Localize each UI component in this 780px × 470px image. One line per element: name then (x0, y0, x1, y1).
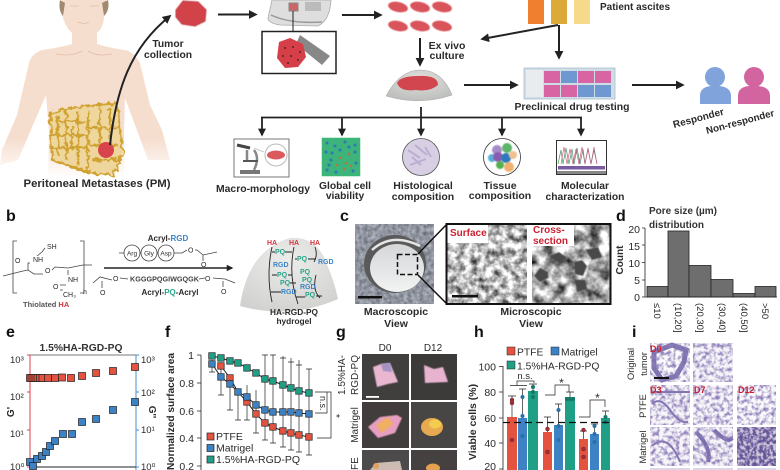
row of tiles cut at bottom edge (650, 468, 776, 470)
arrow: slicer to slices (342, 14, 381, 16)
row labels: 1.5%HA- (337, 355, 348, 395)
panel e: rheology (6, 324, 157, 470)
dashed reference line (503, 422, 612, 424)
row labels: RGD-PQ (350, 355, 361, 395)
legend: 1.5%HA-RGD-PQ (216, 454, 300, 466)
label: Non-responder: Non-responder (705, 108, 776, 137)
labels: thiolated HA atoms: O (45, 268, 51, 275)
legend (507, 347, 599, 372)
series: Matrigel markers (209, 361, 312, 417)
label: Tissue composition: Tissue (483, 180, 517, 192)
row labels: Matrigel (638, 430, 648, 464)
arrow: slices to culture (419, 38, 421, 65)
panel letter b: b (6, 208, 16, 225)
labels: thiolated HA atoms: n (83, 289, 87, 296)
series: PTFE markers (218, 363, 312, 440)
photo: SEM microscopic surface and cross-section (446, 224, 610, 304)
icon: excised tumor (176, 1, 206, 26)
panel b: hydrogel chemistry (3, 208, 338, 326)
panel letter f: f (165, 324, 171, 341)
y axis labels: 5 (634, 275, 640, 287)
x axis labels: (10,20] (672, 303, 683, 333)
label: Ex vivo culture: culture (429, 50, 465, 62)
x axis labels: ≤10 (651, 303, 662, 319)
row labels: tumor (639, 352, 649, 376)
label: Global cell viability: Global cell (319, 181, 371, 192)
tile: original tumor D0 (650, 343, 690, 382)
heading: Peritoneal Metastases (PM): Peritoneal Metastases (PM) (24, 178, 171, 190)
plot frame with coloured axes (27, 355, 139, 470)
illustration: patient torso with intestines (0, 0, 170, 178)
diagram: HA-RGD-PQ hydrogel dome: PQ (280, 280, 291, 287)
heading: Pore size distribution: distribution (649, 220, 704, 231)
icon: non-responder person (738, 67, 770, 104)
axis tick labels: 10² (10, 392, 24, 403)
x axis labels: (20,30] (694, 303, 705, 333)
photo: SEM microscopic surface and cross-section: section (533, 236, 568, 247)
panel c: hydrogel photographs (340, 208, 610, 330)
diagram: thiolated HA structure (3, 241, 92, 293)
axis tick labels: 10³ (141, 355, 155, 366)
y axis with ticks (642, 228, 777, 297)
legend (207, 431, 300, 466)
diagram: HA-RGD-PQ hydrogel dome: RGD (281, 289, 297, 296)
label: stars: * (559, 376, 564, 390)
diagram: HA-RGD-PQ hydrogel dome: HA (310, 240, 320, 247)
label: star: * (330, 414, 341, 418)
x axis labels (651, 303, 770, 333)
photo: macroscopic hydrogel disc (355, 224, 434, 304)
diagram: HA-RGD-PQ hydrogel dome: PQ (305, 292, 316, 299)
icon: responder person (700, 67, 731, 104)
label: Histological composition: Histological (393, 180, 453, 192)
labels: thiolated HA atoms (15, 244, 87, 299)
tile: PTFE D12: D12 (738, 385, 755, 395)
y axis title: Viable cells (%) (467, 384, 479, 460)
y axis labels (628, 224, 640, 304)
column labels: D12 (424, 343, 443, 354)
error bars (209, 355, 312, 455)
label: Molecular characterization: characterization (546, 192, 624, 203)
label: Molecular characterization: Molecular (561, 181, 609, 192)
histogram bars (647, 231, 776, 297)
diagram: KGGGPQGIWGQGK linker: O (221, 289, 227, 296)
arrow: tumor collection curve (110, 16, 170, 145)
labels: thiolated HA atoms: NH (68, 277, 78, 284)
label: Acryl-RGD: Acryl-RGD (148, 234, 188, 243)
label: n.s.: n.s. (517, 371, 533, 382)
tile: PTFE D7 (693, 385, 733, 425)
y axis labels: 0.6 (179, 406, 194, 418)
row labels (626, 348, 649, 464)
legend: PTFE (517, 348, 543, 358)
y axis title: Count: Count (615, 245, 626, 274)
label: stars: * (595, 391, 600, 405)
labels: thiolated HA atoms: O (53, 284, 59, 291)
label: Histological composition: composition (392, 191, 454, 203)
labels: thiolated HA atoms: CH₃ (63, 292, 76, 299)
series: G'' blue squares (26, 398, 138, 470)
icon: tissue composition cells (484, 138, 520, 176)
axis title G'': G'' (146, 406, 157, 418)
tile: original tumor D0: D0 (650, 344, 662, 354)
panel letter i: i (632, 324, 636, 341)
row labels: PTFE (638, 394, 648, 418)
photo: SEM microscopic surface and cross-section: Surface (450, 228, 487, 239)
diagram: KGGGPQGIWGQGK linker (93, 276, 235, 297)
column labels: D0 (379, 343, 392, 354)
y tick labels: 40 (484, 438, 496, 450)
column labels (379, 343, 443, 354)
label: Thiolated HA: Thiolated HA (23, 300, 70, 309)
label: Tissue composition: composition (469, 190, 531, 202)
diagram: HA-RGD-PQ hydrogel dome: HA (267, 240, 277, 247)
y tick labels: 80 (484, 387, 496, 399)
y axis labels: 20 (628, 224, 640, 236)
tile: 1.5%HA-RGD-PQ D12 (411, 354, 457, 400)
heading: 1.5%HA-RGD-PQ: 1.5%HA-RGD-PQ (40, 343, 122, 354)
y axis (197, 355, 201, 470)
y axis labels: 0.4 (179, 433, 194, 445)
y tick labels: 60 (484, 413, 496, 425)
arrow: tumor to slicer (218, 14, 256, 16)
diagram: KGGGPQGIWGQGK linker: KGGGPQGIWGQGK (130, 276, 199, 284)
panel letter g: g (336, 324, 346, 341)
diagram: HA-RGD-PQ hydrogel dome: PQ (297, 256, 308, 263)
tile: Matrigel D12 (411, 402, 457, 448)
branching arrows to analyses (261, 107, 582, 135)
y axis labels (179, 350, 194, 470)
icon: patient ascites tubes (528, 0, 590, 24)
tile: Matrigel D7 (693, 427, 733, 466)
diagram: HA-RGD-PQ hydrogel dome: RGD (300, 284, 316, 291)
label: stars (559, 376, 600, 405)
axis tick labels: 10¹ (141, 425, 155, 436)
panel h: viable cells chart (467, 324, 612, 470)
bars: 1.5%HA-RGD-PQ (528, 391, 610, 470)
legend: 1.5%HA-RGD-PQ (517, 362, 599, 372)
diagram: HA-RGD-PQ hydrogel dome (240, 238, 338, 312)
panel a: peritoneal metastases workflow (0, 0, 776, 203)
tile: PTFE D3 (650, 385, 690, 425)
panel letter c: c (340, 208, 349, 225)
x axis labels: (30,40] (716, 303, 727, 333)
legend: Matrigel (561, 348, 598, 358)
row labels: Matrigel (350, 407, 361, 443)
axis title: Normalized surface area (166, 353, 177, 470)
diagram: HA-RGD-PQ hydrogel dome: PQ (277, 272, 288, 279)
y axis labels: 10 (628, 258, 640, 270)
diagram: HA-RGD-PQ hydrogel dome: HA (289, 240, 299, 247)
label: Tumor collection: collection (144, 50, 192, 61)
diagram: HA-RGD-PQ hydrogel dome: PQ (300, 269, 311, 276)
axis tick labels: 10¹ (10, 429, 24, 440)
diagram: Arg-Gly-Asp chain: Gly (144, 250, 155, 258)
labels: thiolated HA atoms: SH (47, 244, 57, 251)
panel i: histology grid (626, 324, 776, 470)
diagram: HA-RGD-PQ hydrogel dome: PQ (275, 249, 286, 256)
arrow: ascites to drug testing (558, 25, 560, 58)
photo: SEM microscopic surface and cross-section: Cross- (533, 225, 565, 236)
panel f: normalized surface area (165, 324, 341, 470)
arrow: ascites to hydrogel culture (482, 25, 558, 39)
arrow: drug testing to response (632, 84, 683, 86)
tile: Matrigel D12 (737, 427, 776, 466)
label: Global cell viability: viability (326, 191, 364, 202)
diagram: KGGGPQGIWGQGK linker: O (205, 276, 211, 283)
tile: PTFE D0 (362, 450, 409, 470)
y axis (499, 366, 503, 470)
tile: Matrigel D3 (650, 427, 690, 466)
tile: original tumor second view (693, 343, 733, 382)
tile: Matrigel D0 (362, 402, 409, 448)
label: Acryl-PQ-Acryl: Acryl-PQ-Acryl (142, 288, 198, 297)
labels: thiolated HA atoms: O (15, 258, 21, 265)
label: Microscopic View: View (519, 318, 544, 330)
y axis labels: 15 (628, 241, 640, 253)
series: HA-RGD-PQ markers (209, 353, 312, 396)
panel g: photographs (336, 324, 457, 470)
arrow: reaction (104, 267, 232, 269)
label: Macroscopic View: Macroscopic (364, 306, 428, 318)
diagram: HA-RGD-PQ hydrogel dome: RGD (273, 262, 289, 269)
bars: PTFE (507, 417, 588, 470)
diagram: HA-RGD-PQ hydrogel dome: PQ (302, 277, 313, 284)
label: Preclinical drug testing: Preclinical drug testing (514, 101, 630, 113)
y axis labels: 0 (634, 292, 640, 304)
label: Responder: Responder (672, 107, 725, 131)
diagram: Arg-Gly-Asp chain: Asp (160, 250, 172, 258)
panel letter h: h (474, 324, 484, 341)
label: HA-RGD-PQ hydrogel: hydrogel (276, 316, 312, 326)
tile: PTFE D3: D3 (650, 385, 662, 395)
label: Patient ascites: Patient ascites (600, 2, 670, 13)
icon: microscope macro-morphology (234, 139, 289, 177)
diagram: Arg-Gly-Asp chain: Arg (127, 250, 137, 258)
diagram: KGGGPQGIWGQGK linker: O (100, 290, 106, 297)
row labels: Original (626, 348, 636, 380)
icon: viability heat map (322, 138, 360, 176)
x axis labels: >50 (759, 303, 770, 319)
tile: PTFE D7: D7 (694, 385, 706, 395)
icon: tissue slicer (268, 0, 331, 31)
axis tick labels (10, 355, 156, 470)
significance brackets (315, 392, 331, 438)
zoom lines (418, 224, 447, 304)
label: Macro-morphology: Macro-morphology (216, 184, 310, 195)
diagram: KGGGPQGIWGQGK linker: O (113, 276, 119, 283)
error bars and data points (508, 384, 609, 439)
bars: Matrigel (518, 418, 599, 470)
legend: PTFE (216, 431, 243, 443)
series: G' red squares (26, 364, 138, 382)
axis tick labels: 10³ (10, 355, 24, 366)
icon: tissue slices (387, 0, 453, 33)
label: Tumor collection: Tumor (152, 39, 184, 50)
heading: Pore size distribution: Pore size (µm) (649, 206, 717, 217)
axis title G': G' (6, 407, 17, 417)
icon: drug testing multiwell plate (524, 68, 615, 99)
diagram: Arg-Gly-Asp chain (119, 245, 217, 269)
y tick labels (478, 362, 496, 470)
label: Microscopic View: Microscopic (500, 306, 562, 318)
line: Matrigel (212, 364, 309, 414)
line: PTFE (221, 366, 309, 437)
x axis labels: (40,50] (738, 303, 749, 333)
label: Ex vivo culture: Ex vivo (429, 40, 465, 52)
tile: PTFE D12 (737, 385, 776, 425)
y axis labels: 1 (188, 350, 194, 362)
tile: PTFE D12 (411, 450, 457, 470)
y axis labels: 0.8 (179, 378, 194, 390)
panel letter e: e (6, 324, 15, 341)
panel letter d: d (616, 208, 626, 225)
tile: 1.5%HA-RGD-PQ D0 (362, 354, 409, 400)
axis tick labels: 10² (141, 388, 155, 399)
icon: tumor slice in hydrogel dome (386, 70, 452, 101)
label: Macroscopic View: View (384, 318, 409, 330)
y tick labels: 100 (478, 362, 496, 374)
label: n.s.: n.s. (318, 396, 328, 411)
legend: Matrigel (216, 442, 253, 454)
labels: thiolated HA atoms: NH (33, 257, 43, 264)
diagram: Arg-Gly-Asp chain: O (201, 262, 207, 269)
significance brackets (510, 381, 605, 417)
inset: tumor and razor blade (262, 32, 336, 74)
line: HA-RGD-PQ (212, 356, 309, 393)
icon: sequencing chromatogram (556, 140, 606, 174)
row labels (337, 355, 361, 470)
row labels: FE (350, 457, 361, 470)
diagram: Arg-Gly-Asp chain: O (188, 248, 194, 254)
label: HA-RGD-PQ hydrogel: HA-RGD-PQ (270, 307, 319, 317)
arrow: culture to drug testing (464, 84, 517, 86)
panel d: pore size histogram (615, 206, 777, 333)
icon: histology disc (402, 138, 440, 176)
diagram: HA-RGD-PQ hydrogel dome: RGD (318, 259, 334, 266)
